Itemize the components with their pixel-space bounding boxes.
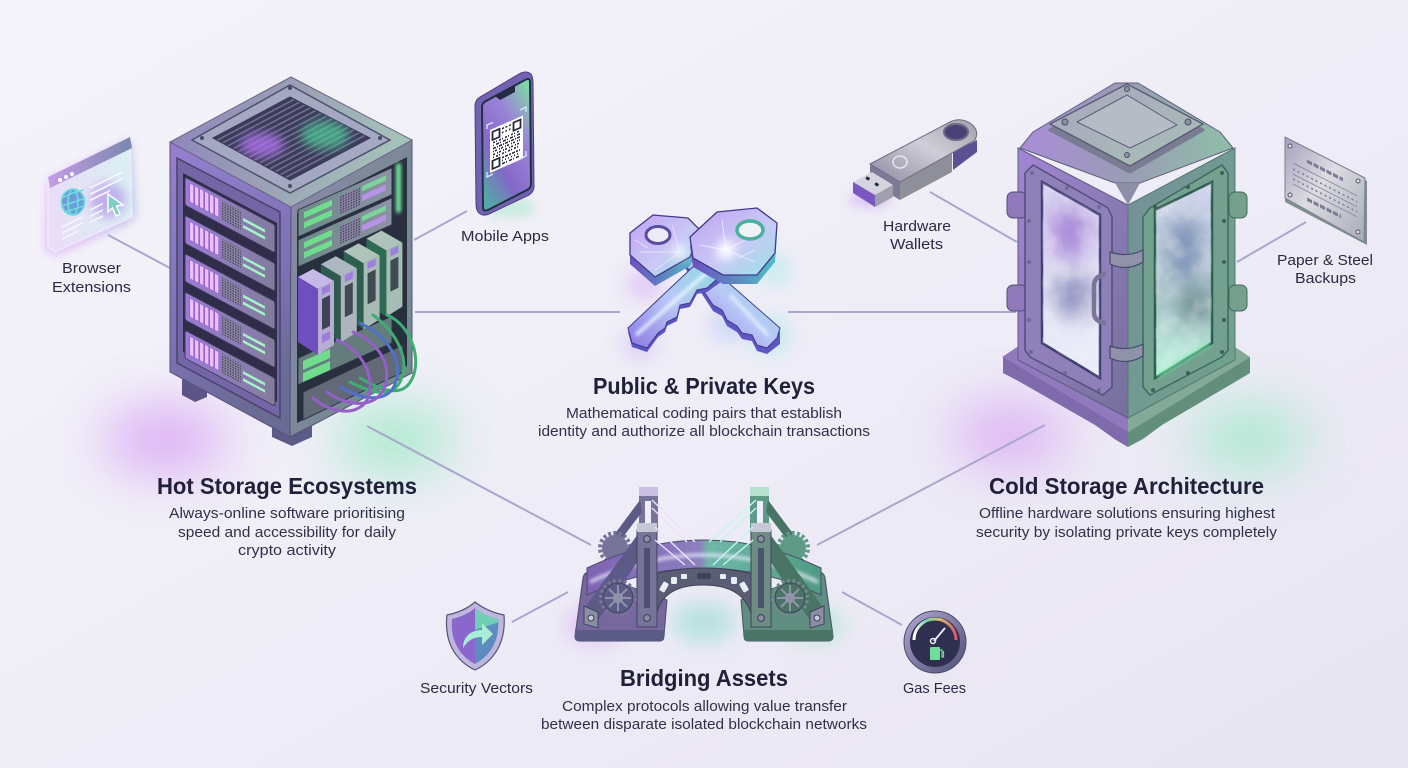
connector: security vectors [512,592,568,622]
label: gas fees: Gas Fees [903,680,966,697]
heading and text: hot storage ecosystems: Always-online software prioritising [169,505,405,522]
icon: crossed crystal keys [624,208,789,355]
back key [630,215,780,354]
heading and text: public and private keys: Public & Private Keys [593,373,815,399]
centre hinges [1110,250,1143,362]
label: browser extensions [52,260,131,296]
heading and text: bridging assets: Bridging Assets [620,665,788,691]
vault base [1003,347,1250,447]
icon: mobile phone with QR code [475,72,536,218]
connector: browser extensions [108,235,170,268]
icon: steel backup plate [1285,137,1367,245]
heading and text: bridging assets: between disparate isolated blockchain networks [541,716,867,733]
right bridge rear tower and base [741,487,833,641]
label: security vectors: Security Vectors [420,680,533,697]
front key [628,208,777,352]
icon: browser window [46,137,136,255]
label: paper and steel backups: Backups [1295,270,1356,287]
heading and text: hot storage ecosystems: crypto activity [238,542,337,559]
connector: hot storage to keys [415,311,620,313]
icon: security shield [446,602,504,670]
label: hardware wallets [883,218,951,253]
icon: gas fee gauge [904,611,966,673]
label: mobile apps: Mobile Apps [461,228,549,245]
door handle [1094,274,1106,323]
right door [1143,165,1228,395]
label: hardware wallets: Hardware [883,218,951,235]
connector: hardware wallets [930,192,1017,242]
connector: cold storage to bridge [817,425,1045,545]
rack units, right face [298,168,392,267]
connector: paper and steel backups [1237,222,1306,262]
connector: mobile apps [414,211,467,240]
heading and text: public and private keys [538,373,870,440]
label: browser extensions: Browser [62,260,121,277]
label: paper and steel backups: Paper & Steel [1277,252,1373,269]
heading and text: public and private keys: identity and authorize all blockchain transactions [538,423,870,440]
label: hardware wallets: Wallets [890,236,943,253]
connector: keys to cold storage [788,311,1016,313]
icon: cold storage vault [1003,83,1250,447]
connector: gas fees [842,592,902,625]
globe [61,189,85,215]
suspension cables [652,500,756,565]
heading and text: cold storage architecture [976,473,1278,541]
icon: mechanical bridge [575,487,833,642]
left bridge front tower and gear [584,523,657,628]
heading and text: bridging assets: Complex protocols allowing value transfer [562,698,847,715]
drive bays [298,231,402,355]
label: browser extensions: Extensions [52,279,131,296]
heading and text: public and private keys: Mathematical coding pairs that establish [566,405,842,422]
heading and text: bridging assets [541,665,867,733]
server blades, left face [185,177,275,406]
connector: hot storage to bridge [367,426,591,545]
left bridge rear tower and base [575,487,667,641]
heading and text: cold storage architecture: Cold Storage Architecture [989,473,1264,499]
heading and text: cold storage architecture: security by isolating private keys completely [976,524,1278,541]
network cables [313,315,416,411]
heading and text: cold storage architecture: Offline hardware solutions ensuring highest [979,505,1276,522]
bridge deck [587,540,821,618]
cursor [108,194,123,216]
icon: USB hardware wallet [848,120,977,208]
heading and text: hot storage ecosystems: speed and accessibility for daily [178,524,397,541]
heading and text: hot storage ecosystems [157,473,417,559]
right bridge front tower and gear [751,523,824,628]
label: paper and steel backups [1277,252,1373,287]
side hinges [1007,192,1027,311]
left door [1025,165,1112,395]
heading and text: hot storage ecosystems: Hot Storage Ecosystems [157,473,417,499]
icon: server rack [170,77,416,446]
